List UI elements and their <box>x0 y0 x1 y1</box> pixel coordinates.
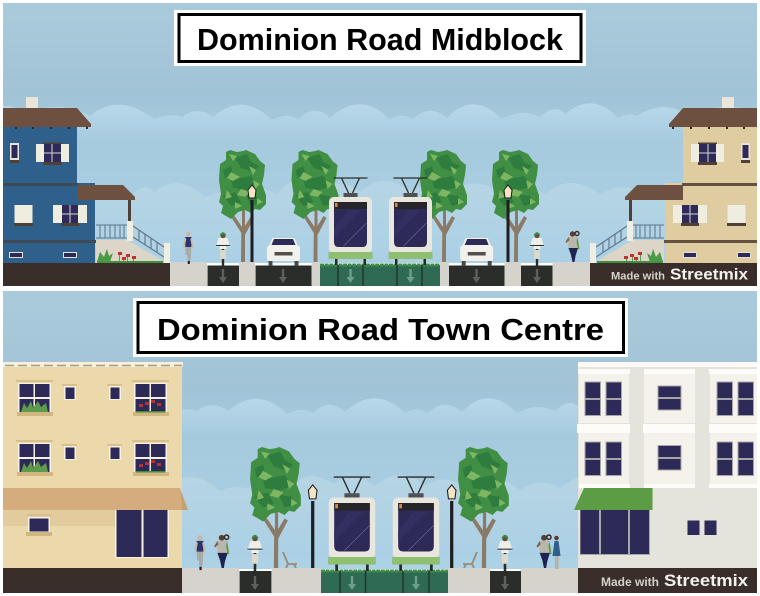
panel: Dominion Road Town Centre <box>0 291 760 593</box>
sky <box>3 3 757 263</box>
sky <box>3 291 757 569</box>
title sign <box>174 10 586 66</box>
cars <box>267 238 493 266</box>
right white building <box>574 362 757 568</box>
street trees <box>250 447 509 568</box>
clouds <box>3 104 742 210</box>
streetmix credit: Made with <box>601 577 659 589</box>
pedestrians <box>195 535 560 570</box>
streetmix credit: Made with <box>611 270 665 282</box>
panel: Dominion Road Midblock <box>0 3 760 286</box>
streetmix credit <box>611 266 748 284</box>
left blue house <box>3 97 170 263</box>
title sign: Dominion Road Town Centre <box>157 312 604 347</box>
right tan house <box>590 97 757 263</box>
street surface <box>3 262 757 286</box>
streetmix credit <box>601 571 749 590</box>
street lamps <box>248 185 512 262</box>
streetmix credit: Streetmix <box>670 266 748 284</box>
benches <box>283 552 477 568</box>
lane arrows <box>251 576 509 590</box>
cyclists <box>247 535 513 572</box>
street trees <box>219 150 539 262</box>
title sign: Dominion Road Midblock <box>197 22 564 57</box>
street lamps <box>308 485 456 568</box>
trams <box>328 178 432 265</box>
clouds <box>182 398 578 507</box>
left cream building <box>3 362 188 568</box>
street surface <box>3 568 757 593</box>
title sign <box>133 298 628 357</box>
cyclists <box>216 232 544 267</box>
trams <box>328 477 440 571</box>
pedestrians <box>183 231 580 264</box>
streetmix credit: Streetmix <box>664 571 749 590</box>
lane arrows <box>219 269 541 283</box>
